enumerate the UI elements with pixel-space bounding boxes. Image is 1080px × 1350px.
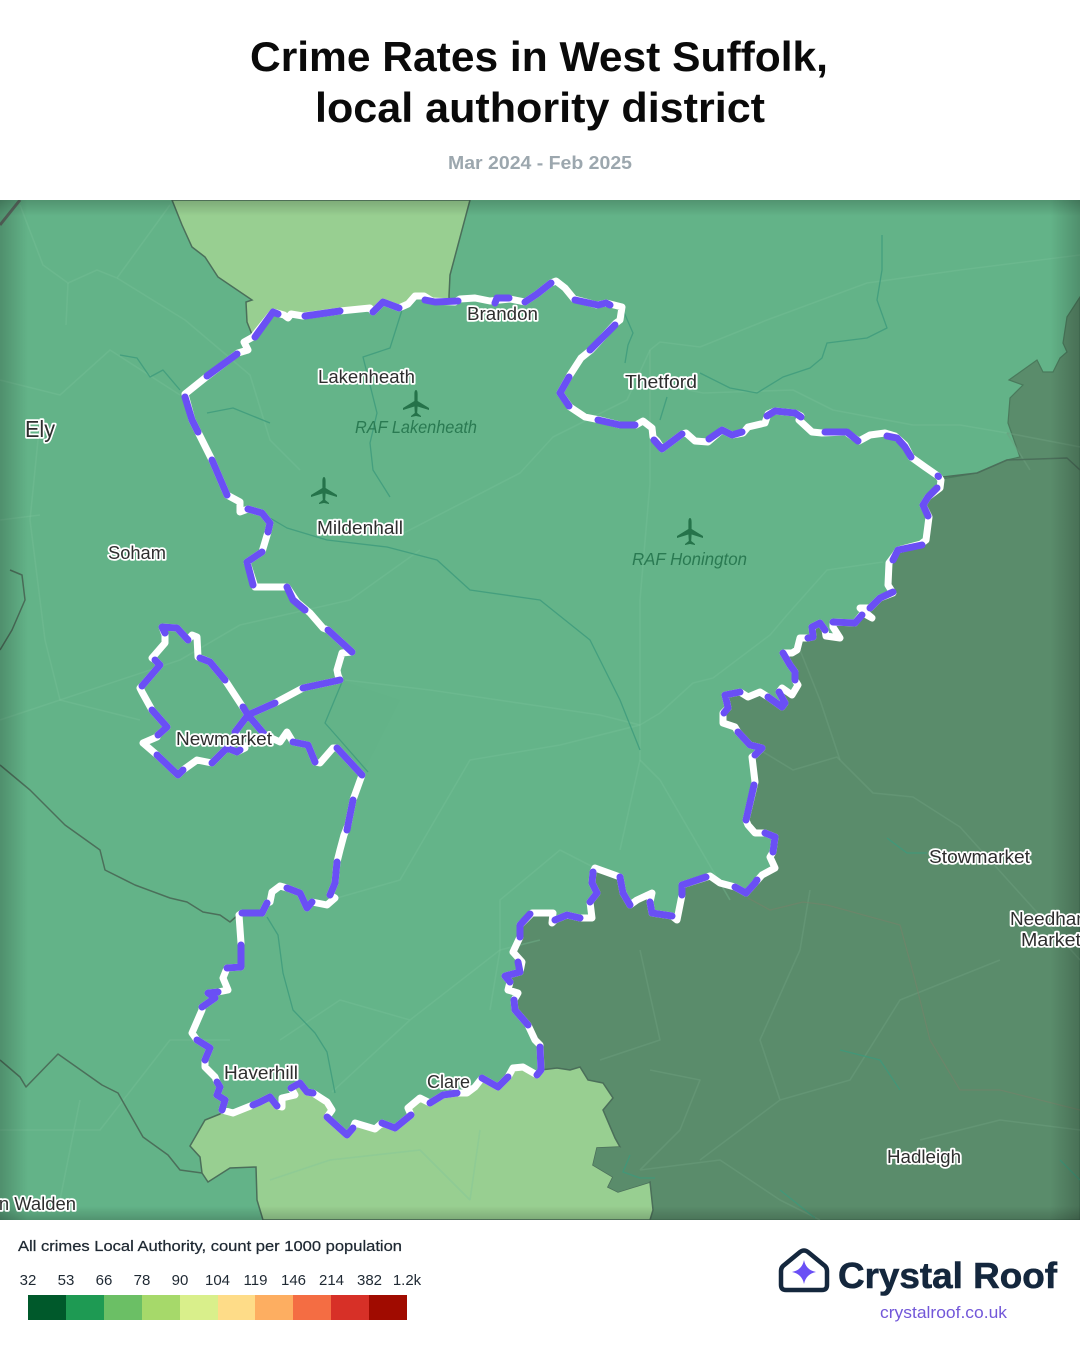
legend scale values: 119 <box>244 1272 267 1289</box>
place labels: Brandon <box>467 304 538 324</box>
legend scale values: 1.2k <box>393 1272 422 1289</box>
icon: airplane RAF Lakenheath <box>403 390 429 417</box>
icon: airplane RAF Honington <box>677 518 703 545</box>
legend scale values: 146 <box>281 1272 306 1289</box>
place labels: Lakenheath <box>318 367 415 387</box>
place labels: RAF Lakenheath <box>355 417 477 437</box>
West Suffolk boundary: purple dashes <box>142 283 938 1135</box>
legend scale values: 32 <box>20 1272 36 1289</box>
logo wordmark: Crystal Roof <box>838 1255 1058 1296</box>
legend title: All crimes Local Authority, count per 1000 population <box>18 1238 402 1255</box>
website url: crystalroof.co.uk <box>880 1304 1008 1322</box>
icon: airplane Mildenhall <box>311 477 337 504</box>
region: small dark patch south <box>593 1147 650 1192</box>
map panel <box>0 200 1080 1220</box>
region: higher-rate district to the east <box>500 297 1080 1220</box>
legend scale values: 382 <box>357 1272 382 1289</box>
title: Crime Rates in West Suffolk, <box>250 33 828 80</box>
map edge vignette <box>0 200 1080 1220</box>
region: lower-rate district to the south <box>190 1050 653 1220</box>
place labels: Haverhill <box>224 1063 298 1083</box>
place labels: Clare <box>427 1072 470 1092</box>
place labels: RAF Honington <box>632 549 747 569</box>
region: lower-rate district to the north <box>172 200 470 340</box>
region: West Suffolk district fill <box>185 281 941 1135</box>
place labels: Stowmarket <box>929 847 1030 867</box>
legend colour bar <box>28 1295 407 1320</box>
legend scale values: 53 <box>58 1272 74 1289</box>
legend scale values: 66 <box>96 1272 112 1289</box>
title: local authority district <box>315 84 765 131</box>
rivers <box>120 235 1080 1218</box>
logo: Crystal Roof <box>781 1250 1058 1322</box>
place labels: Soham <box>108 543 166 563</box>
place labels: Hadleigh <box>887 1147 961 1167</box>
legend <box>18 1238 422 1320</box>
place labels: Mildenhall <box>317 518 403 538</box>
title <box>250 33 828 131</box>
place labels <box>0 304 1080 1214</box>
legend scale values: 214 <box>319 1272 344 1289</box>
faint parish boundary <box>748 898 1080 1110</box>
roads <box>0 205 1080 1220</box>
legend scale values <box>20 1272 422 1289</box>
place labels: Thetford <box>625 372 697 392</box>
place labels: Ely <box>25 416 55 442</box>
legend scale values: 104 <box>205 1272 230 1289</box>
legend scale values: 90 <box>172 1272 188 1289</box>
legend scale values: 78 <box>134 1272 150 1289</box>
icon: house with star <box>781 1250 827 1290</box>
place labels: Newmarket <box>176 729 272 749</box>
place labels: Market <box>1021 930 1080 950</box>
district border lines <box>0 200 1080 1173</box>
map base: neighbouring districts <box>0 200 1080 1220</box>
subtitle: date range: Mar 2024 - Feb 2025 <box>448 153 632 173</box>
West Suffolk boundary: white line <box>140 281 941 1135</box>
